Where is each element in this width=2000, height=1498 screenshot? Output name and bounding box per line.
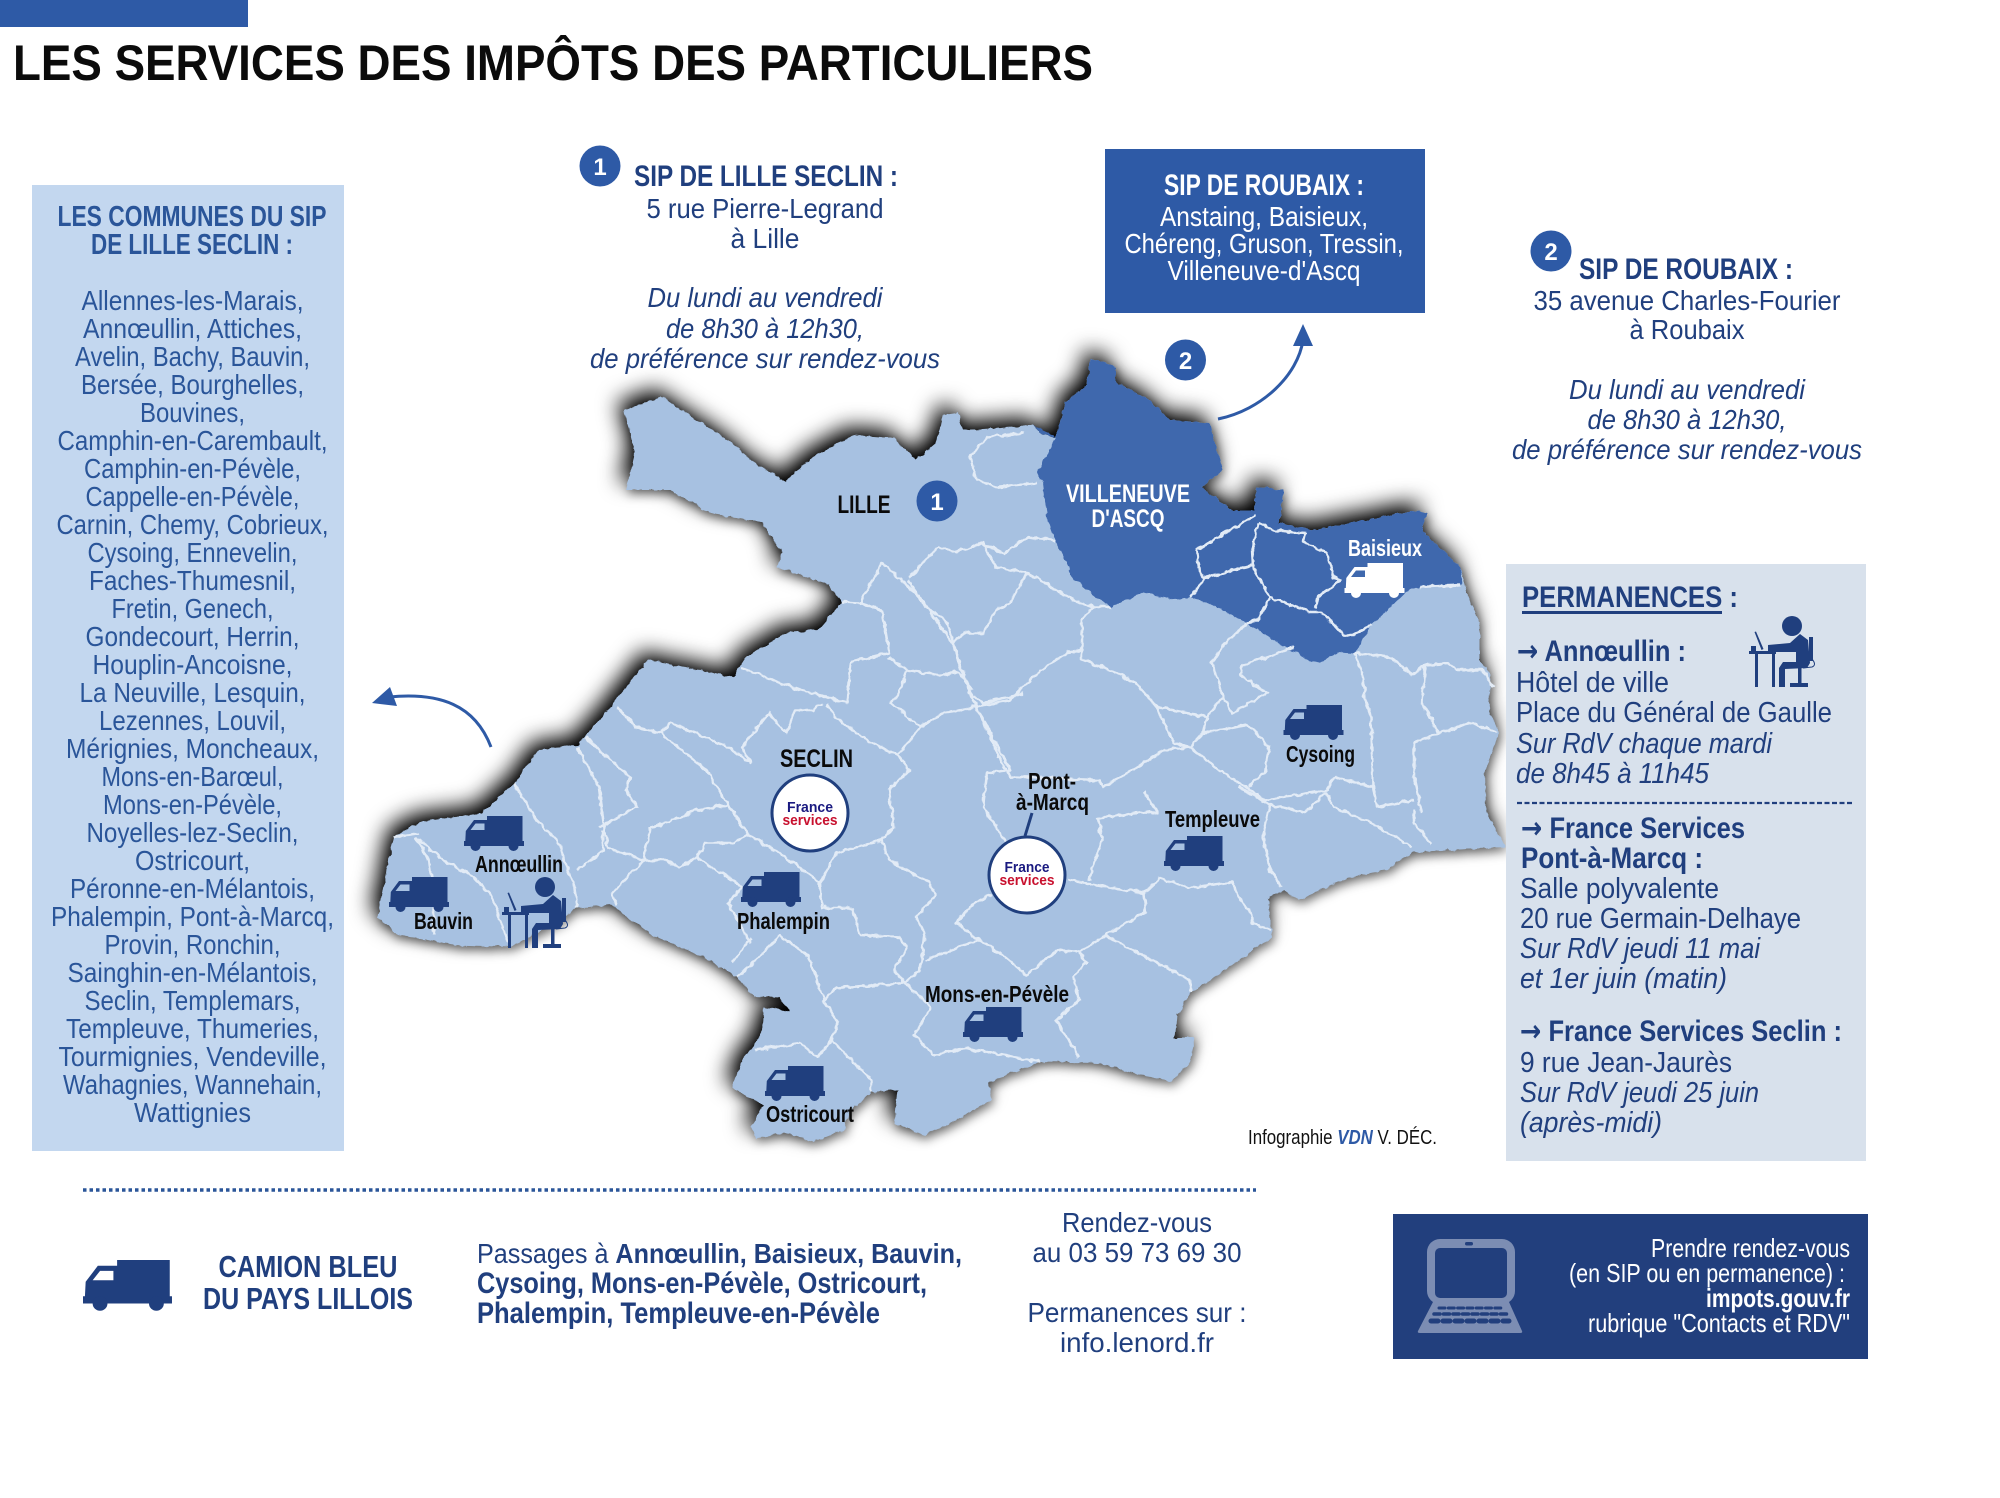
commune list: Sainghin-en-Mélantois, <box>68 957 318 988</box>
badge 2 <box>1530 230 1572 272</box>
text block: rendez-vous: Rendez-vous <box>1062 1207 1212 1238</box>
icon: laptop <box>1418 1239 1522 1333</box>
commune list: Wahagnies, Wannehain, <box>63 1069 322 1100</box>
arrow: toward SIP de Roubaix box <box>1218 324 1313 419</box>
permanence: France Services Pont-à-Marcq: et 1er juin (matin) <box>1520 963 1727 995</box>
icon: France services Seclin: France <box>787 800 833 816</box>
map: commune boundaries <box>394 433 1497 1092</box>
permanence: France Services Pont-à-Marcq <box>1520 811 1801 995</box>
panel: SIP de Roubaix communes <box>1105 149 1425 313</box>
camion heading: CAMION BLEU <box>218 1249 398 1284</box>
text block: SIP de Roubaix address: à Roubaix <box>1630 314 1744 345</box>
commune list: Cappelle-en-Pévèle, <box>86 481 300 512</box>
map label: Templeuve with truck <box>1164 806 1260 871</box>
permanence: Annœullin: Sur RdV chaque mardi <box>1516 728 1773 760</box>
arrow: toward communes panel <box>372 687 491 747</box>
permanence: France Services Seclin: → France Services Seclin : <box>1520 1014 1842 1049</box>
text block: SIP de Lille Seclin: de préférence sur rendez-vous <box>590 343 940 374</box>
panel heading: LES COMMUNES DU SIP <box>58 201 326 233</box>
panel: SIP de Roubaix communes: Chéreng, Gruson, Tressin, <box>1124 228 1404 259</box>
commune list: Phalempin, Pont-à-Marcq, <box>51 901 334 932</box>
panel: SIP de Roubaix communes: Anstaing, Baisieux, <box>1160 201 1368 232</box>
text block: SIP de Roubaix address: de préférence sur rendez-vous <box>1512 434 1862 465</box>
text block: SIP de Lille Seclin: Du lundi au vendredi <box>648 282 883 313</box>
panel: communes du SIP de Lille Seclin <box>32 185 344 1151</box>
text block: SIP de Lille Seclin: SIP DE LILLE SECLIN : <box>634 160 898 193</box>
commune list: Mons-en-Barœul, <box>102 761 284 792</box>
map label: Bauvin with truck: Bauvin <box>414 908 473 934</box>
commune list: Wattignies <box>134 1097 251 1128</box>
permanence: Annœullin: Place du Général de Gaulle <box>1516 697 1832 729</box>
permanence: France Services Pont-à-Marcq: Sur RdV jeudi 11 mai <box>1520 933 1761 965</box>
map label: Seclin: SECLIN <box>780 745 853 773</box>
icon: France services Pont-à-Marcq: services <box>1000 873 1054 889</box>
top accent bar <box>0 0 248 27</box>
commune list: Allennes-les-Marais, <box>82 285 304 316</box>
text block: rendez-vous: au 03 59 73 69 30 <box>1032 1237 1242 1268</box>
panel: online appointment <box>1393 1214 1868 1359</box>
commune list <box>51 285 334 1128</box>
commune list: Mons-en-Pévèle, <box>103 789 282 820</box>
map of communes <box>378 340 1505 1142</box>
map base: light blue territory with shadow <box>378 358 1505 1142</box>
panel: online appointment: (en SIP ou en permanence) : <box>1569 1258 1845 1288</box>
camion heading <box>203 1249 413 1316</box>
panel heading: DE LILLE SECLIN : <box>91 229 293 261</box>
permanence: France Services Seclin: 9 rue Jean-Jaurès <box>1520 1047 1732 1079</box>
badge 2: 2 <box>1544 239 1558 266</box>
text block: passages <box>477 1238 962 1330</box>
commune list: Bouvines, <box>140 397 245 428</box>
icon: France services Seclin: services <box>782 813 838 829</box>
badge 1 <box>580 146 620 186</box>
permanence: Annœullin: de 8h45 à 11h45 <box>1516 758 1710 790</box>
map label: Phalempin with truck <box>737 872 830 934</box>
panel: online appointment: rubrique "Contacts et RDV" <box>1588 1308 1850 1338</box>
commune list: Avelin, Bachy, Bauvin, <box>75 341 310 372</box>
commune list: Carnin, Chemy, Cobrieux, <box>56 509 328 540</box>
permanence: France Services Pont-à-Marcq: → France Services <box>1521 811 1745 846</box>
commune list: Tourmignies, Vendeville, <box>58 1041 326 1072</box>
map label: Villeneuve d'Ascq: VILLENEUVE <box>1066 480 1190 508</box>
permanences heading: PERMANENCES : <box>1522 581 1738 614</box>
text block: passages: Passages à Annœullin, Baisieux, Bauvin, <box>477 1238 962 1269</box>
panel: online appointment: Prendre rendez-vous <box>1651 1233 1850 1263</box>
text block: SIP de Lille Seclin: de 8h30 à 12h30, <box>666 313 864 344</box>
commune list: Ostricourt, <box>135 845 250 876</box>
map badge 1 <box>916 480 958 522</box>
title: LES SERVICES DES IMPÔTS DES PARTICULIERS <box>13 34 1093 91</box>
map label: Mons-en-Pévèle with truck <box>925 981 1069 1042</box>
text block: SIP de Roubaix address: 35 avenue Charles-Fourier <box>1534 285 1840 316</box>
map badge 1: 1 <box>930 489 944 516</box>
text block: SIP de Lille Seclin <box>580 146 940 374</box>
icon: France services Pont-à-Marcq <box>989 813 1065 913</box>
commune list: Péronne-en-Mélantois, <box>70 873 315 904</box>
text block: rendez-vous: info.lenord.fr <box>1060 1327 1214 1358</box>
panel: SIP de Roubaix communes: SIP DE ROUBAIX : <box>1164 169 1364 202</box>
panel: online appointment: impots.gouv.fr <box>1706 1283 1850 1313</box>
commune list: Templeuve, Thumeries, <box>66 1013 319 1044</box>
credit: Infographie VDN V. DÉC. <box>1248 1126 1437 1149</box>
text block: rendez-vous <box>1028 1207 1246 1358</box>
map label: Villeneuve d'Ascq: D'ASCQ <box>1092 505 1164 533</box>
icon: person at desk on map <box>502 877 568 948</box>
commune list: Gondecourt, Herrin, <box>86 621 300 652</box>
map label: Pont-à-Marcq: à-Marcq <box>1016 789 1089 815</box>
commune list: Houplin-Ancoisne, <box>92 649 292 680</box>
map label: Annœullin with truck: Annœullin <box>475 851 563 877</box>
icon: France services Pont-à-Marcq: France <box>1004 860 1050 876</box>
map label: Baisieux with white truck: Baisieux <box>1348 535 1422 561</box>
map badge 2: 2 <box>1179 348 1192 375</box>
map label: Baisieux with white truck <box>1344 535 1422 598</box>
panel: permanences <box>1506 564 1866 1161</box>
permanence: Annœullin: Hôtel de ville <box>1516 667 1669 699</box>
permanence: France Services Pont-à-Marcq: Salle polyvalente <box>1520 873 1719 905</box>
commune list: Camphin-en-Pévèle, <box>84 453 301 484</box>
map label: Lille: LILLE <box>838 491 890 519</box>
text block: SIP de Lille Seclin: à Lille <box>730 223 800 254</box>
commune list: Mérignies, Moncheaux, <box>66 733 319 764</box>
map label: Cysoing with truck: Cysoing <box>1286 741 1355 767</box>
commune list: La Neuville, Lesquin, <box>80 677 306 708</box>
map: highlighted Roubaix SIP communes <box>1033 358 1462 663</box>
commune list: Camphin-en-Carembault, <box>58 425 328 456</box>
commune list: Annœullin, Attiches, <box>83 313 302 344</box>
permanence: France Services Seclin: (après-midi) <box>1520 1107 1662 1139</box>
map badge 2 <box>1165 340 1206 380</box>
commune list: Fretin, Genech, <box>112 593 274 624</box>
commune list: Lezennes, Louvil, <box>99 705 286 736</box>
commune list: Bersée, Bourghelles, <box>81 369 304 400</box>
text block: SIP de Roubaix address: de 8h30 à 12h30, <box>1588 404 1786 435</box>
text block: SIP de Roubaix address <box>1512 230 1862 465</box>
badge 1: 1 <box>593 154 607 181</box>
permanence: Annœullin: → Annœullin : <box>1517 634 1686 669</box>
text block: SIP de Lille Seclin: 5 rue Pierre-Legrand <box>646 193 884 224</box>
panel: SIP de Roubaix communes: Villeneuve-d'Ascq <box>1168 255 1360 286</box>
map label: Ostricourt with truck: Ostricourt <box>766 1101 854 1127</box>
text block: passages: Cysoing, Mons-en-Pévèle, Ostricourt, <box>477 1267 927 1300</box>
footer: camion bleu <box>83 1249 413 1316</box>
text block: passages: Phalempin, Templeuve-en-Pévèle <box>477 1297 880 1330</box>
text block: rendez-vous: Permanences sur : <box>1028 1297 1246 1328</box>
commune list: Provin, Ronchin, <box>104 929 280 960</box>
map label: Villeneuve d'Ascq <box>1066 480 1190 533</box>
map label: Bauvin with truck <box>389 877 473 934</box>
panel heading <box>58 201 326 261</box>
text block: SIP de Roubaix address: SIP DE ROUBAIX : <box>1579 253 1793 286</box>
map label: Cysoing with truck <box>1284 705 1355 767</box>
map label: Templeuve with truck: Templeuve <box>1165 806 1260 832</box>
map label: Mons-en-Pévèle with truck: Mons-en-Pévèle <box>925 981 1069 1007</box>
commune list: Faches-Thumesnil, <box>89 565 296 596</box>
map label: Pont-à-Marcq <box>1016 768 1089 815</box>
permanence: France Services Pont-à-Marcq: Pont-à-Marcq : <box>1521 842 1703 875</box>
commune list: Seclin, Templemars, <box>84 985 300 1016</box>
map label: Annœullin with truck <box>464 816 563 877</box>
permanence: France Services Seclin: Sur RdV jeudi 25 juin <box>1520 1077 1759 1109</box>
permanence: France Services Pont-à-Marcq: 20 rue Germain-Delhaye <box>1520 903 1801 935</box>
map label: Ostricourt with truck <box>765 1066 854 1127</box>
text block: SIP de Roubaix address: Du lundi au vendredi <box>1569 374 1806 405</box>
icon: person at desk <box>1749 616 1814 687</box>
commune list: Cysoing, Ennevelin, <box>88 537 298 568</box>
commune list: Noyelles-lez-Seclin, <box>86 817 298 848</box>
camion heading: DU PAYS LILLOIS <box>203 1281 413 1316</box>
map label: Pont-à-Marcq: Pont- <box>1028 768 1076 794</box>
permanence: France Services Seclin <box>1520 1014 1842 1139</box>
map label: Phalempin with truck: Phalempin <box>737 908 830 934</box>
icon: big truck <box>83 1260 172 1311</box>
permanence: Annœullin <box>1516 634 1832 790</box>
icon: France services Seclin <box>772 775 848 851</box>
